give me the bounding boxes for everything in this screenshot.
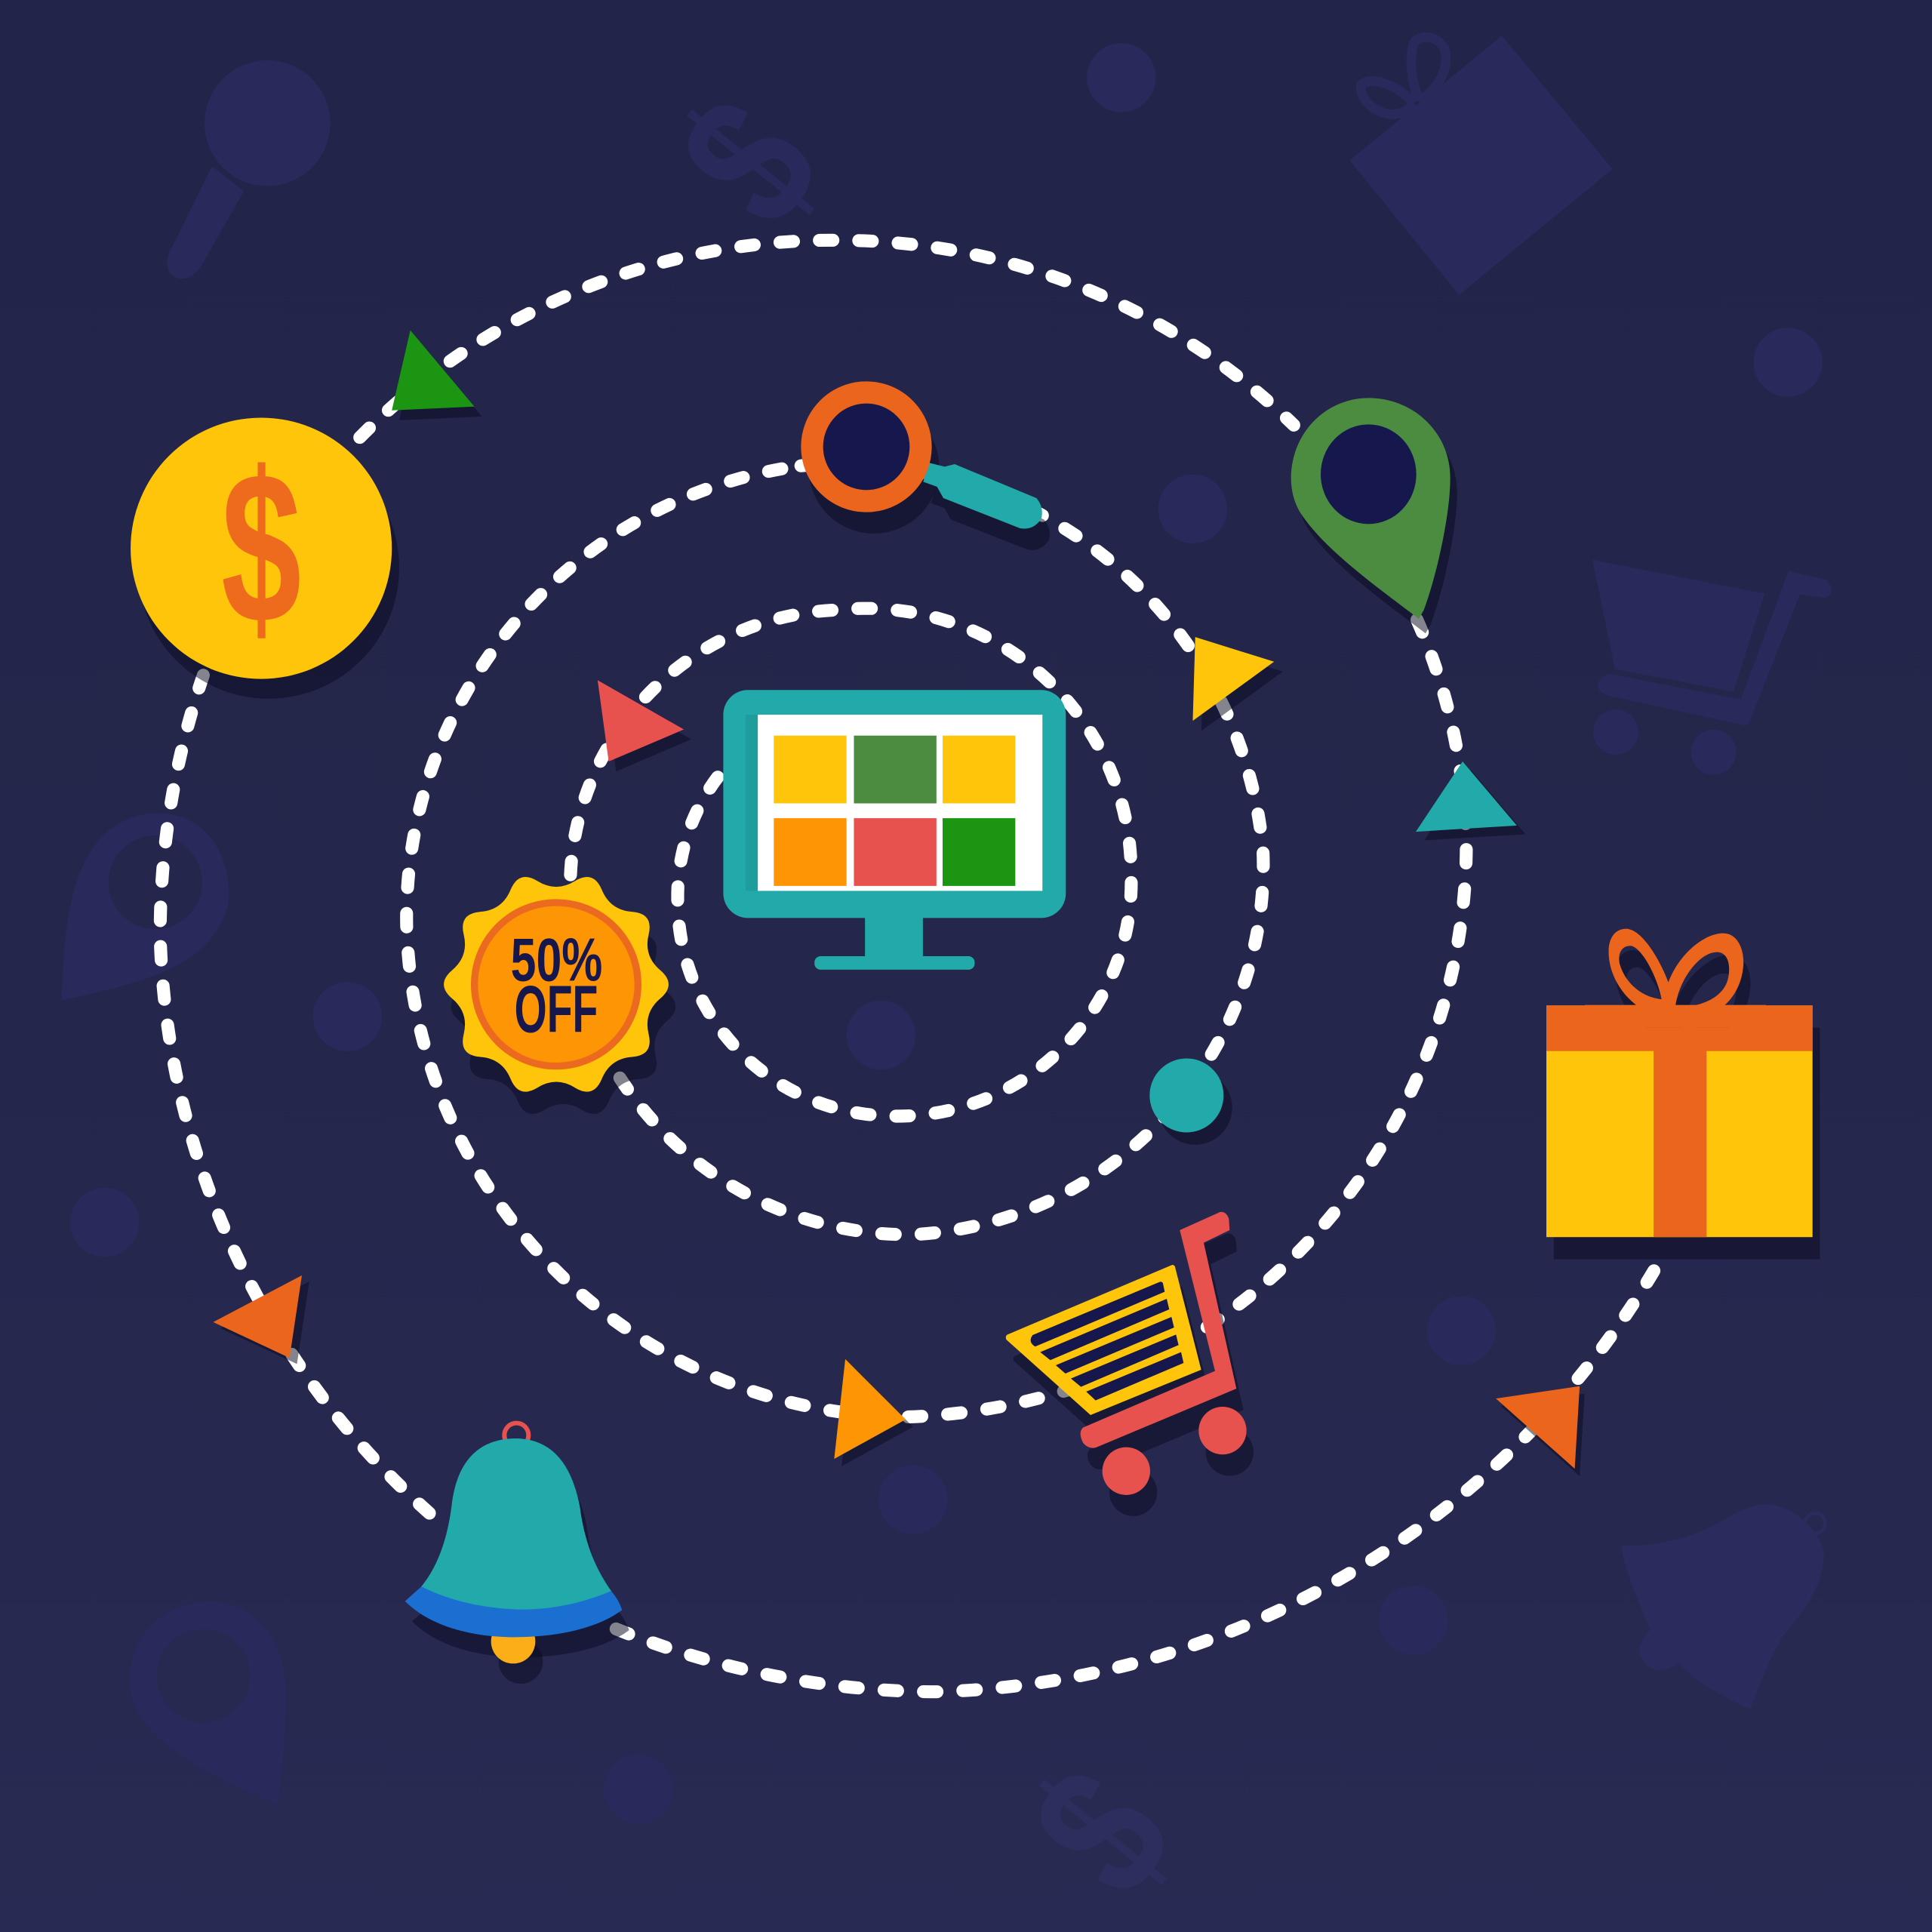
arrow: yellow triangle: [1192, 637, 1283, 731]
icon: magnifier: [808, 392, 1050, 550]
ghost: cart: [1592, 560, 1832, 775]
icon: bell: [405, 1423, 629, 1684]
cart wheels: [1103, 1407, 1247, 1495]
ghost: gift box: [1349, 35, 1613, 295]
ghost: lower pin: [129, 1602, 286, 1805]
screen tiles: [774, 736, 1015, 886]
icons in base coordinates: [131, 331, 1820, 1476]
dashed spiral path: [160, 240, 1663, 1692]
icon: gift box: [1546, 1005, 1820, 1260]
arrow: green triangle: [392, 331, 481, 420]
ghost: top dollar sign: $: [638, 60, 859, 262]
arrow: right orange triangle: [1496, 1386, 1585, 1476]
basket slats: [1031, 1281, 1183, 1401]
icon: discount badge: [444, 877, 675, 1114]
ghost: bell: [1621, 1504, 1825, 1709]
ghost: left pin: [62, 813, 229, 1001]
icon: location pin: [1291, 398, 1457, 633]
icon: teal dot: [1149, 1058, 1232, 1145]
arrow: red triangle: [598, 680, 691, 771]
ghost: magnifier: [167, 60, 331, 278]
ghost: bottom dollar sign: $: [991, 1730, 1211, 1932]
icon: dollar coin: [131, 417, 399, 699]
gift bow: [1585, 929, 1766, 1028]
arrow: left orange triangle: [213, 1275, 309, 1364]
icon: shopping cart: [1006, 1212, 1254, 1516]
dollar sign: $: [221, 427, 301, 669]
badge text: 50%: 50%: [511, 926, 602, 994]
icon: monitor: [723, 690, 1066, 970]
badge text: OFF: OFF: [515, 971, 598, 1046]
arrow: teal triangle: [1416, 761, 1525, 841]
arrow: bottom orange triangle: [834, 1359, 913, 1466]
